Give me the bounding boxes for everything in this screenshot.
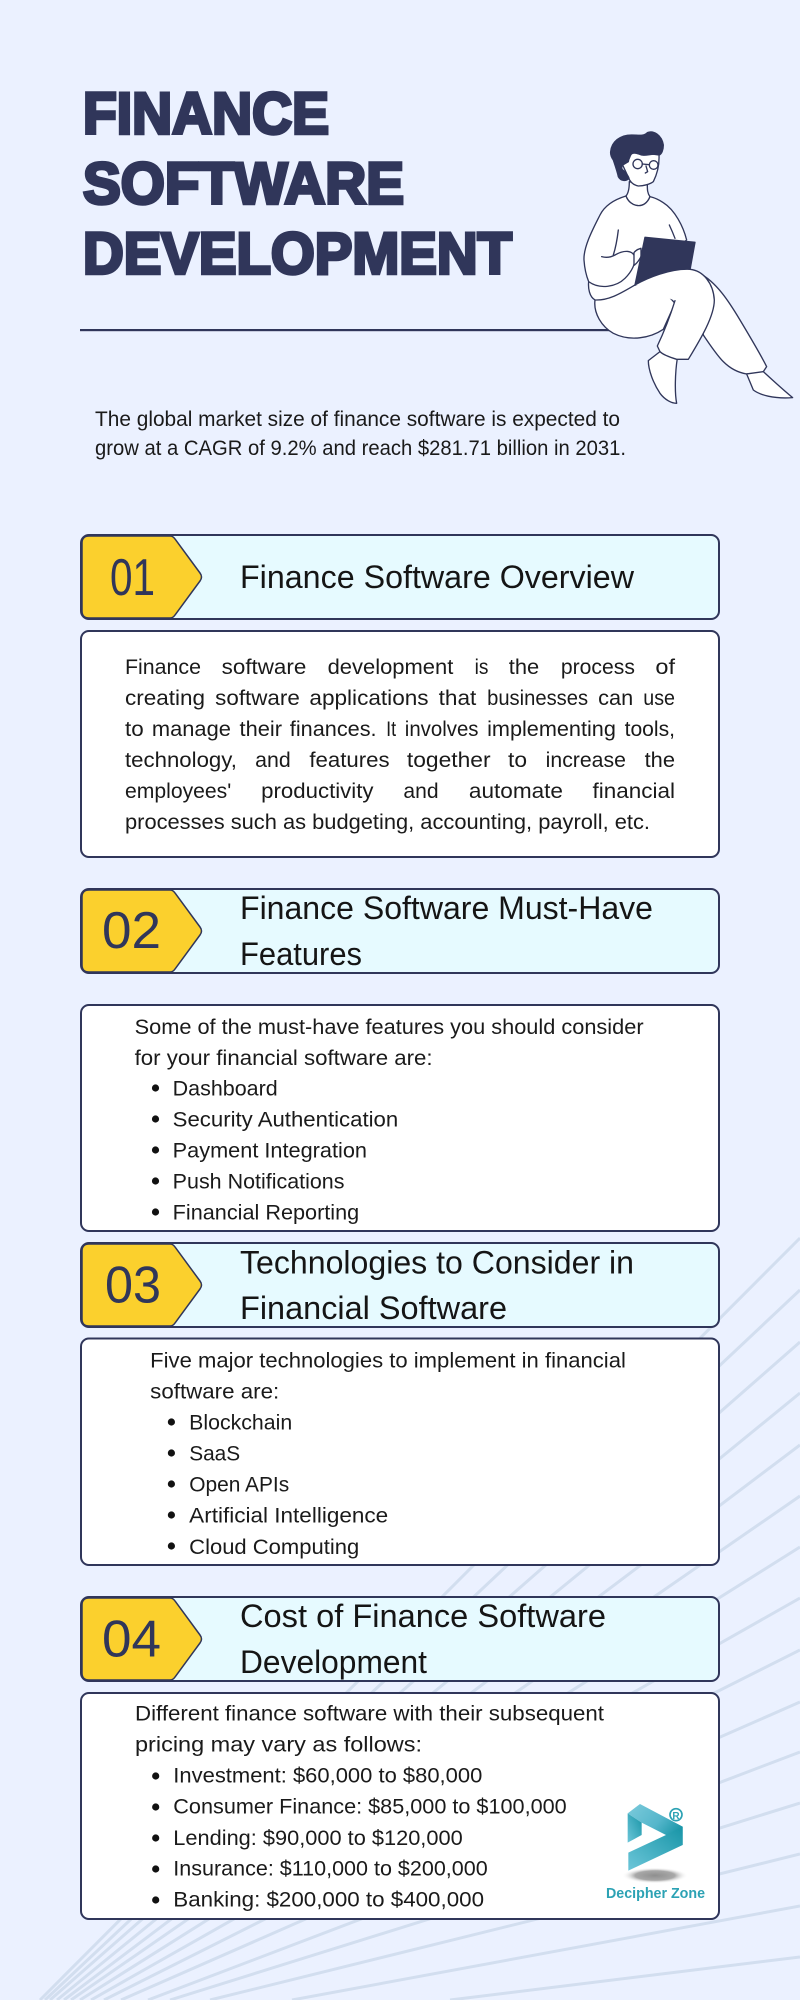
logo wordmark: Decipher Zone: [606, 1885, 705, 1902]
overview paragraph: implementing: [487, 718, 616, 741]
overview paragraph: can: [598, 687, 633, 710]
features bullet list: Payment Integration: [173, 1140, 367, 1163]
logo mark: [628, 1804, 683, 1871]
pricing intro text: [135, 1703, 604, 1757]
heading 03: [240, 1244, 634, 1326]
overview paragraph: of: [655, 656, 675, 679]
overview paragraph: software: [222, 656, 306, 679]
title: FINANCE: [83, 82, 329, 146]
heading 03: Financial Software: [240, 1290, 507, 1326]
logo: Decipher Zone: [606, 1804, 705, 1902]
panel: section 04 header: [81, 1597, 719, 1681]
panel: section 01 body: [81, 631, 719, 857]
technologies intro text: [150, 1349, 626, 1403]
overview paragraph: tools,: [625, 718, 675, 741]
features intro text: [135, 1016, 644, 1070]
number 02: 02: [102, 902, 161, 960]
overview paragraph: that: [439, 687, 476, 710]
overview paragraph: software: [215, 687, 300, 710]
number 03: 03: [105, 1257, 161, 1315]
overview paragraph: [125, 656, 675, 834]
heading 04: Cost of Finance Software: [240, 1598, 606, 1634]
panel: section 02 header: [81, 889, 719, 973]
overview paragraph: development: [328, 656, 453, 679]
overview paragraph: creating: [125, 687, 205, 710]
panel: section 02 body: [81, 1005, 719, 1231]
heading 04: Development: [240, 1644, 427, 1680]
heading 03: Technologies to Consider in: [240, 1244, 634, 1280]
panel: section 03 header: [81, 1243, 719, 1327]
overview paragraph: involves: [405, 718, 478, 741]
overview paragraph: to: [125, 718, 144, 741]
features bullet list: Financial Reporting: [173, 1202, 359, 1225]
pricing bullet list: Investment: $60,000 to $80,000: [173, 1765, 482, 1788]
technologies bullet list: SaaS: [189, 1443, 240, 1466]
title: SOFTWARE: [83, 152, 404, 216]
icon: 03 yellow tag: [82, 1244, 202, 1326]
logo shadow: [622, 1868, 688, 1884]
registered mark: R: [672, 1811, 680, 1822]
features bullet list: Dashboard: [173, 1077, 278, 1100]
features bullet list: Security Authentication: [173, 1108, 398, 1132]
pricing bullet list: Lending: $90,000 to $120,000: [173, 1827, 463, 1850]
technologies intro text: software are:: [150, 1380, 279, 1403]
overview paragraph: process: [561, 656, 635, 679]
overview paragraph: productivity: [261, 780, 374, 803]
panel: section 01 header: [81, 535, 719, 619]
overview paragraph: features: [309, 749, 390, 772]
pricing bullet list: Consumer Finance: $85,000 to $100,000: [173, 1796, 567, 1818]
intro paragraph: [95, 408, 626, 460]
overview paragraph: automate: [469, 780, 563, 803]
overview paragraph: employees': [125, 780, 231, 803]
overview paragraph: is: [475, 656, 488, 679]
overview paragraph: the: [509, 656, 539, 679]
technologies bullet list: Blockchain: [189, 1412, 292, 1434]
panel: section 04 body: [81, 1693, 719, 1919]
icon: 02 yellow tag: [82, 890, 202, 972]
technologies bullet list: Open APIs: [189, 1473, 289, 1496]
overview paragraph: finances.: [290, 718, 377, 741]
overview paragraph: to: [508, 749, 527, 772]
overview paragraph: and: [255, 749, 291, 772]
icon: 01 yellow tag: [82, 536, 202, 618]
pricing bullet list: [152, 1765, 567, 1912]
heading 04: [240, 1598, 606, 1680]
overview paragraph: processes such as budgeting, accounting, payroll, etc.: [125, 811, 650, 834]
overview paragraph: technology,: [125, 749, 237, 772]
technologies intro text: Five major technologies to implement in financial: [150, 1349, 626, 1372]
icon: 04 yellow tag: [82, 1598, 202, 1680]
pricing bullet list: Banking: $200,000 to $400,000: [173, 1889, 484, 1912]
technologies bullet list: Artificial Intelligence: [189, 1505, 388, 1528]
features bullet list: Push Notifications: [173, 1171, 344, 1194]
title: [83, 82, 512, 286]
pricing bullet list: Insurance: $110,000 to $200,000: [173, 1858, 488, 1881]
features intro text: for your financial software are:: [135, 1047, 433, 1070]
title divider line: [80, 329, 615, 331]
overview paragraph: financial: [592, 780, 675, 803]
heading 02: Finance Software Must-Have: [240, 890, 653, 926]
features bullet list: [152, 1077, 398, 1225]
illustration: person with tablet: [584, 132, 793, 403]
heading 01: Finance Software Overview: [240, 559, 635, 595]
overview paragraph: and: [403, 780, 439, 803]
overview paragraph: the: [645, 749, 675, 772]
technologies bullet list: Cloud Computing: [189, 1536, 359, 1559]
intro paragraph: grow at a CAGR of 9.2% and reach $281.71 billion in 2031.: [95, 437, 626, 460]
overview paragraph: their: [240, 718, 282, 741]
overview paragraph: together: [407, 749, 491, 772]
number 01: 01: [110, 549, 155, 607]
number 04: 04: [102, 1611, 161, 1669]
intro paragraph: The global market size of finance software is expected to: [95, 408, 620, 431]
heading 02: Features: [240, 936, 362, 972]
pricing intro text: Different finance software with their subsequent: [135, 1703, 604, 1726]
overview paragraph: businesses: [487, 687, 588, 710]
overview paragraph: It: [386, 718, 396, 741]
features intro text: Some of the must-have features you should consider: [135, 1016, 644, 1039]
title: DEVELOPMENT: [83, 222, 512, 286]
panel: section 03 body: [81, 1338, 719, 1565]
overview paragraph: manage: [152, 718, 231, 741]
overview paragraph: increase: [546, 749, 626, 772]
overview paragraph: applications: [309, 687, 429, 710]
overview paragraph: use: [643, 687, 675, 710]
technologies bullet list: [168, 1412, 388, 1559]
pricing intro text: pricing may vary as follows:: [135, 1734, 422, 1757]
overview paragraph: Finance: [125, 656, 201, 679]
heading 02: [240, 890, 653, 972]
